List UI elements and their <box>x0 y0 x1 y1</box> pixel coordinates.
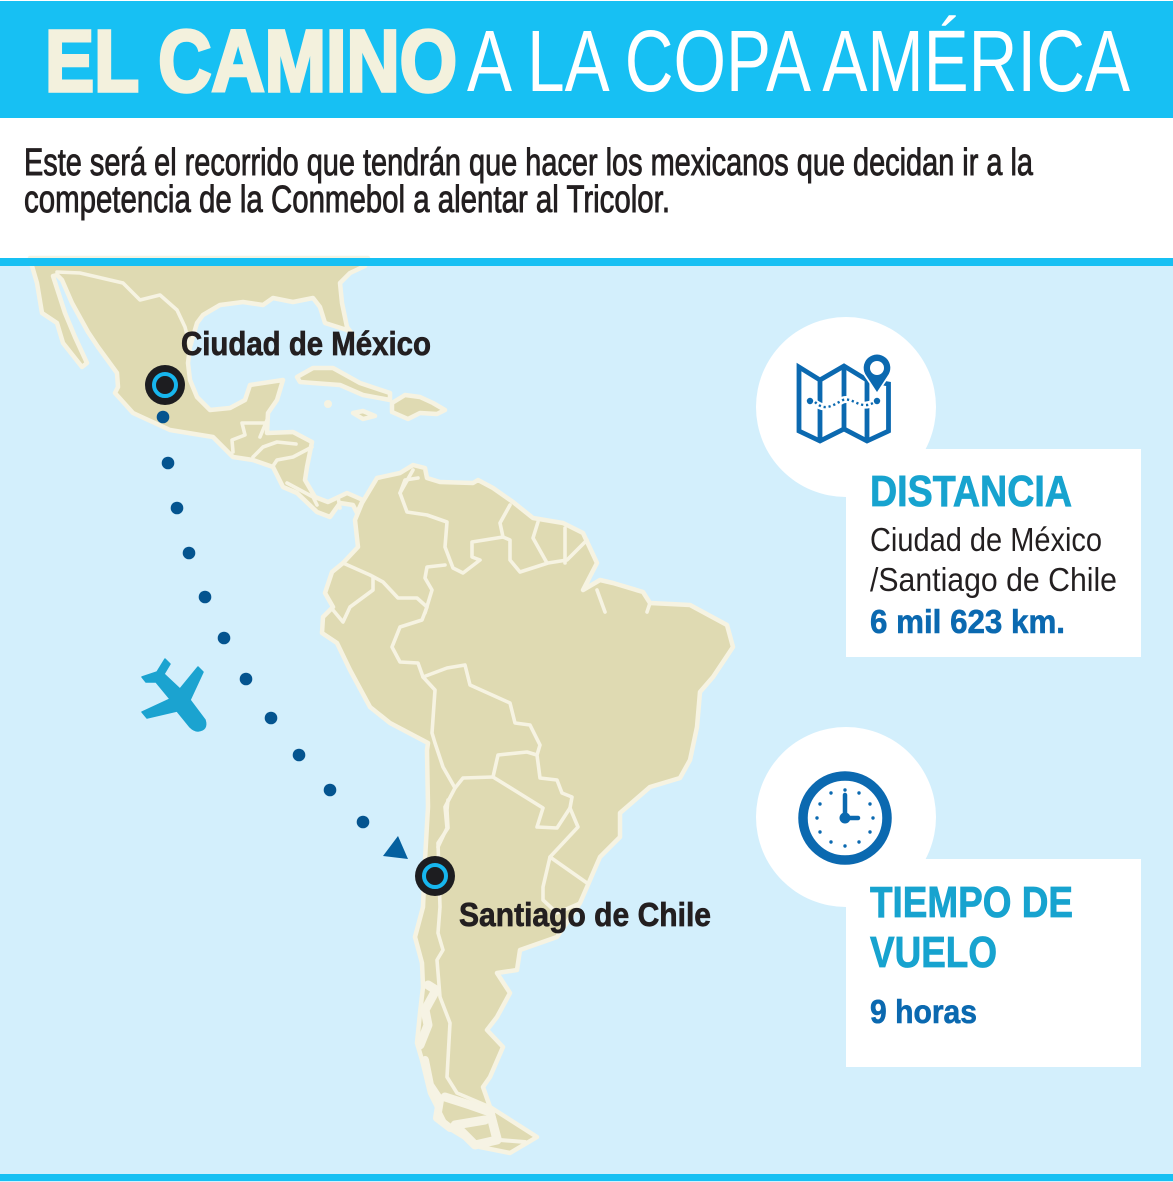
heading: distancia: DISTANCIA <box>870 467 1072 516</box>
intro text: competencia de la Conmebol a alentar al Tricolor. <box>24 179 670 221</box>
map: Caribbean islands <box>297 368 445 419</box>
route text: Ciudad de México <box>870 521 1102 558</box>
route text: /Santiago de Chile <box>870 561 1117 598</box>
panel: distancia <box>756 317 1141 657</box>
panel: map background <box>0 258 1173 1182</box>
route arrowhead <box>383 836 408 859</box>
Patagonian fjords <box>420 985 525 1145</box>
label: Santiago de Chile: Santiago de Chile <box>459 896 711 933</box>
flight time value: 9 horas <box>870 993 977 1030</box>
distance value: 6 mil 623 km. <box>870 603 1065 640</box>
flight route dots <box>157 411 369 828</box>
map: North and Central America <box>30 258 368 517</box>
heading: tiempo de vuelo <box>870 878 1073 977</box>
marker: Santiago de Chile <box>415 856 455 896</box>
title banner: EL CAMINO <box>45 13 457 110</box>
icon: plane <box>142 659 206 731</box>
label: Ciudad de México: Ciudad de México <box>181 325 431 362</box>
intro text <box>24 142 1034 221</box>
heading: tiempo de vuelo: TIEMPO DE <box>870 878 1073 927</box>
map: South America <box>322 465 733 1153</box>
bottom map stripe <box>0 1174 1173 1181</box>
icon: folded map with pin <box>799 355 890 441</box>
panel: tiempo de vuelo <box>756 727 1141 1067</box>
icon: clock <box>803 776 887 860</box>
heading: tiempo de vuelo: VUELO <box>870 928 997 977</box>
top map stripe <box>0 258 1173 266</box>
route text <box>870 521 1117 598</box>
title banner <box>0 1 1173 118</box>
marker: Ciudad de México <box>145 365 185 405</box>
